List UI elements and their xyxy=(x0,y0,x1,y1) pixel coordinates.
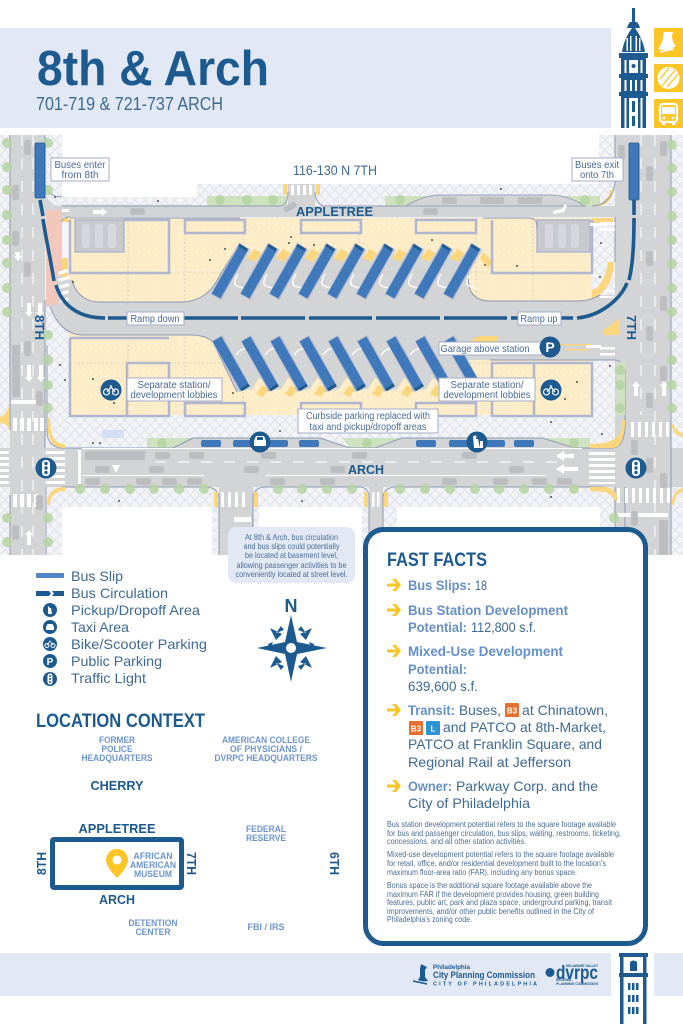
label: african american museum: AMERICAN xyxy=(130,860,176,871)
badge: B3 second: B3 xyxy=(411,724,422,734)
icon: bus xyxy=(654,99,683,128)
logo: city planning commission: Philadelphia xyxy=(433,964,470,971)
fact: bus station development: 112,800 s.f. xyxy=(471,619,536,635)
callout: buses enter xyxy=(51,158,109,181)
icon: traffic light right xyxy=(626,458,646,478)
footnote: bonus space: maximum FAR if the development provides housing, green building xyxy=(387,890,599,899)
street label: 8TH: 8TH xyxy=(32,315,47,340)
road curb lines xyxy=(10,135,671,555)
label: american college: DVRPC HEADQUARTERS xyxy=(214,753,318,764)
dotted grid lines xyxy=(70,218,590,415)
footnote: bus station xyxy=(387,820,621,846)
street markings xyxy=(11,204,668,545)
fact: bus slips xyxy=(387,577,487,593)
fact: transit: Buses, xyxy=(459,702,501,718)
badge: L: L xyxy=(431,724,436,734)
logo: dvrpc: DELAWARE VALLEY xyxy=(566,964,599,968)
footnote: bonus space: Philadelphia's zoning code. xyxy=(387,915,472,924)
location context map xyxy=(34,735,342,938)
callout: garage above station: Garage above station xyxy=(440,344,530,355)
label: american college: AMERICAN COLLEGE xyxy=(222,735,310,746)
logo: dvrpc xyxy=(546,963,599,986)
lane lines xyxy=(22,135,655,555)
fact: transit: at Chinatown, xyxy=(522,702,608,718)
callout: separate lobbies right: development lobbies xyxy=(444,390,530,401)
pink entry apron xyxy=(46,272,57,305)
fact: bus slips: 18 xyxy=(475,577,487,593)
label: american college: OF PHYSICIANS / xyxy=(230,744,302,755)
compass: N xyxy=(284,596,298,616)
street: appletree: APPLETREE xyxy=(78,821,156,836)
label: american college xyxy=(214,735,318,764)
legend: bus circulation: Bus Circulation xyxy=(71,585,168,601)
icon: traffic light left xyxy=(36,458,56,478)
pedestrians xyxy=(54,188,611,502)
street: arch: ARCH xyxy=(99,892,135,907)
street: 6TH: 6TH xyxy=(327,852,342,875)
trees xyxy=(2,138,677,547)
icon: bike left xyxy=(100,380,122,400)
callout: basement note: allowing passenger activities to be xyxy=(236,561,347,570)
callout: buses enter: from 8th xyxy=(62,170,98,181)
callout: separate lobbies right xyxy=(439,378,535,401)
label: former police headquarters: POLICE xyxy=(102,744,132,755)
fact: owner: Parkway Corp. and the xyxy=(456,778,598,794)
fast facts heading: FAST FACTS xyxy=(387,550,487,571)
label: former police headquarters: HEADQUARTERS xyxy=(82,753,152,764)
crosswalks xyxy=(0,185,670,507)
logo: dvrpc: dvrpc xyxy=(556,963,598,984)
exit bus xyxy=(629,143,639,200)
central bus area xyxy=(46,243,625,392)
fact: mixed-use development: 639,600 s.f. xyxy=(408,678,478,694)
label: detention center: CENTER xyxy=(136,927,171,938)
lower block curbs and lay-bys on Arch xyxy=(47,345,625,448)
lower bus slips xyxy=(217,338,487,390)
legend: bike: Bike/Scooter Parking xyxy=(71,636,207,652)
footnote: mixed-use: maximum floor-area ratio (FAR), including any bonus space. xyxy=(387,868,577,877)
footnote: bus station: for bus and passenger circulation, bus slips, waiting, restrooms, ticketing, xyxy=(387,829,621,838)
building outlines xyxy=(70,220,592,416)
street: 7TH: 7TH xyxy=(184,852,199,875)
garages xyxy=(75,220,590,252)
label: federal reserve xyxy=(246,824,286,844)
footnote: bus station: Bus station development potential refers to the square footage available xyxy=(387,820,616,829)
street: cherry: CHERRY xyxy=(90,778,144,793)
footnote: bus station: concessions, and all other station activities. xyxy=(387,837,526,846)
fact: owner: City of Philadelphia xyxy=(408,795,530,811)
callout: separate lobbies left xyxy=(127,378,222,401)
icon: ball xyxy=(654,64,683,92)
bus circulation route xyxy=(40,200,634,318)
fact: transit: PATCO at Franklin Square, and xyxy=(408,736,602,752)
legend: bus slip: Bus Slip xyxy=(71,568,123,584)
footnote: bonus space: features, public art, park and plaza space, underground parking, transit xyxy=(387,898,613,907)
callout: buses exit: onto 7th xyxy=(580,170,614,181)
icon: taxi xyxy=(250,432,270,452)
white blocks xyxy=(62,135,599,197)
footnote: mixed-use xyxy=(387,850,614,877)
label: FBI / IRS: FBI / IRS xyxy=(248,922,284,933)
fact: transit: and PATCO at 8th-Market, xyxy=(443,719,606,735)
legend: bus slip xyxy=(36,568,123,584)
legend: pickup: Pickup/Dropoff Area xyxy=(71,602,200,618)
fact: transit: Regional Rail at Jefferson xyxy=(408,754,571,770)
parked blue cars xyxy=(201,440,534,447)
icon: tower base xyxy=(619,953,648,1024)
footnote: bonus space: improvements, and/or other public benefits outlined in the City of xyxy=(387,907,595,916)
header band xyxy=(0,28,611,128)
logo: city planning commission xyxy=(413,964,537,988)
icon: liberty bell xyxy=(654,28,683,57)
subtitle address: 701-719 & 721-737 ARCH xyxy=(36,94,223,114)
icon: city hall tower xyxy=(619,8,648,128)
callout: separate lobbies right: Separate station/ xyxy=(450,380,524,391)
callout: buses exit: Buses exit xyxy=(575,160,619,171)
label: african american museum: MUSEUM xyxy=(134,869,172,880)
street cars xyxy=(12,140,668,555)
fact: mixed-use development: Potential: xyxy=(408,661,467,677)
left and right curb sidewalks xyxy=(46,210,614,298)
legend xyxy=(36,568,207,686)
logo: dvrpc: PLANNING COMMISSION xyxy=(556,982,599,986)
legend: taxi xyxy=(43,619,129,635)
roads xyxy=(0,135,683,555)
label: former police headquarters: FORMER xyxy=(99,735,135,746)
fact: bus station development xyxy=(387,602,568,635)
footer band xyxy=(0,953,683,996)
callout: curbside parking: Curbside parking replaced with xyxy=(306,411,430,422)
label: detention center: DETENTION xyxy=(128,918,178,929)
callout: basement note: and bus slips could potentially xyxy=(244,542,340,551)
legend: parking: Public Parking xyxy=(71,653,162,669)
address label: 116-130 N 7TH: 116-130 N 7TH xyxy=(293,162,377,178)
street label: ARCH: ARCH xyxy=(348,462,384,477)
logo: dvrpc: REGIONAL xyxy=(556,978,572,982)
fact: mixed-use development xyxy=(387,643,563,694)
callout: curbside parking: taxi and pickup/dropoff areas xyxy=(310,422,426,433)
fact: owner xyxy=(387,778,598,811)
fact: transit xyxy=(387,702,608,770)
fact: owner: Owner: xyxy=(408,778,452,794)
badge: B3 xyxy=(505,703,519,717)
icon: bike right xyxy=(540,380,562,400)
callout: ramp down: Ramp down xyxy=(130,314,180,325)
label: african american museum xyxy=(130,851,176,880)
site yellow footprint xyxy=(70,218,592,415)
top sidewalk strips and lay-by xyxy=(62,190,613,206)
callout: basement note: conveniently located at street level. xyxy=(236,570,348,579)
label: former police headquarters xyxy=(82,735,152,764)
footnote: mixed-use: Mixed-use development potential refers to the square footage available xyxy=(387,850,614,859)
title: 8th & Arch xyxy=(37,42,269,96)
icon: public parking xyxy=(540,336,560,358)
yellow corner curbs xyxy=(0,184,683,507)
fact: bus station development: Bus Station Development xyxy=(408,602,568,618)
entry bus xyxy=(35,143,45,198)
callout: curbside parking xyxy=(298,409,438,433)
legend: parking: P xyxy=(47,657,54,668)
callout: ramp up: Ramp up xyxy=(520,314,558,325)
label: federal reserve: RESERVE xyxy=(246,833,286,844)
callout: separate lobbies left: development lobbies xyxy=(130,390,218,401)
badge: B3: B3 xyxy=(507,706,518,716)
legend: taxi: Taxi Area xyxy=(71,619,129,635)
compass xyxy=(257,596,327,682)
label: federal reserve: FEDERAL xyxy=(246,824,286,835)
callout: basement note: At 8th & Arch, bus circulation xyxy=(245,533,338,542)
fact: transit: Transit: xyxy=(408,702,455,718)
street label: 7TH: 7TH xyxy=(624,315,639,340)
label: african american museum: AFRICAN xyxy=(134,851,173,862)
callout: separate lobbies left: Separate station/ xyxy=(138,380,211,391)
logo: city planning commission: CITY OF PHILADELPHIA xyxy=(433,982,537,988)
icon: location pin xyxy=(106,849,128,878)
site rectangle xyxy=(52,840,182,888)
yellow notches between slips xyxy=(247,249,592,397)
callout: basement note xyxy=(228,527,355,583)
upper bus slips xyxy=(216,245,479,297)
site plan map xyxy=(0,135,683,555)
fact: bus slips: Bus Slips: xyxy=(408,577,471,593)
location context heading: LOCATION CONTEXT xyxy=(36,711,205,732)
badge: B3 second xyxy=(409,721,423,735)
logo: city planning commission: City Planning Commission xyxy=(433,970,535,980)
footnote: bonus space xyxy=(387,881,613,924)
callout: basement note: be located at basement level, xyxy=(245,551,338,560)
street label: APPLETREE: APPLETREE xyxy=(296,204,373,219)
legend: traffic light: Traffic Light xyxy=(71,670,146,686)
label: detention center xyxy=(128,918,178,938)
icon: pickup xyxy=(466,432,488,452)
badge: L xyxy=(426,721,440,735)
icon: public parking: P xyxy=(545,339,555,355)
callout: buses enter: Buses enter xyxy=(54,160,106,171)
fact: bus station development: Potential: xyxy=(408,619,467,635)
panel: fast facts xyxy=(366,530,646,944)
footnote: bonus space: Bonus space is the additional square footage available above the xyxy=(387,881,592,890)
street: 8TH: 8TH xyxy=(34,852,49,875)
callout: buses exit xyxy=(572,158,623,181)
fact: mixed-use development: Mixed-Use Development xyxy=(408,643,563,659)
footnote: mixed-use: for retail, office, and/or residential development built to the location's xyxy=(387,859,606,868)
